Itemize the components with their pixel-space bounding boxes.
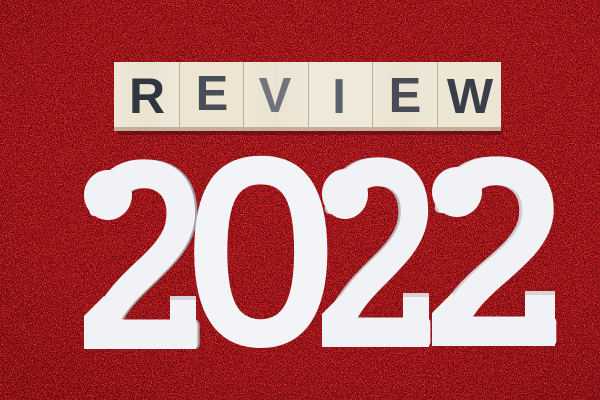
- digit 0: 0: [189, 108, 332, 395]
- digit 2 first: 2: [82, 111, 204, 399]
- digit 2 first: 2: [84, 111, 206, 399]
- block R: [114, 62, 179, 127]
- block E: [180, 62, 243, 127]
- block E second: [373, 62, 437, 127]
- wooden letter blocks: REVIEW: [114, 62, 503, 135]
- digit 2 third: 2: [426, 108, 561, 396]
- numeral 2022: [82, 108, 564, 399]
- block R: R: [129, 68, 165, 124]
- block W: W: [447, 70, 494, 124]
- block W: [438, 62, 501, 127]
- digit 2 third: 2: [430, 108, 564, 396]
- block I: [309, 62, 372, 127]
- digit 2 second: 2: [318, 110, 434, 397]
- block V: V: [259, 69, 292, 123]
- block V: [244, 62, 308, 127]
- block E: E: [196, 67, 228, 121]
- block E second: E: [389, 69, 421, 123]
- digit 2 second: 2: [320, 110, 437, 397]
- block I: I: [332, 70, 346, 124]
